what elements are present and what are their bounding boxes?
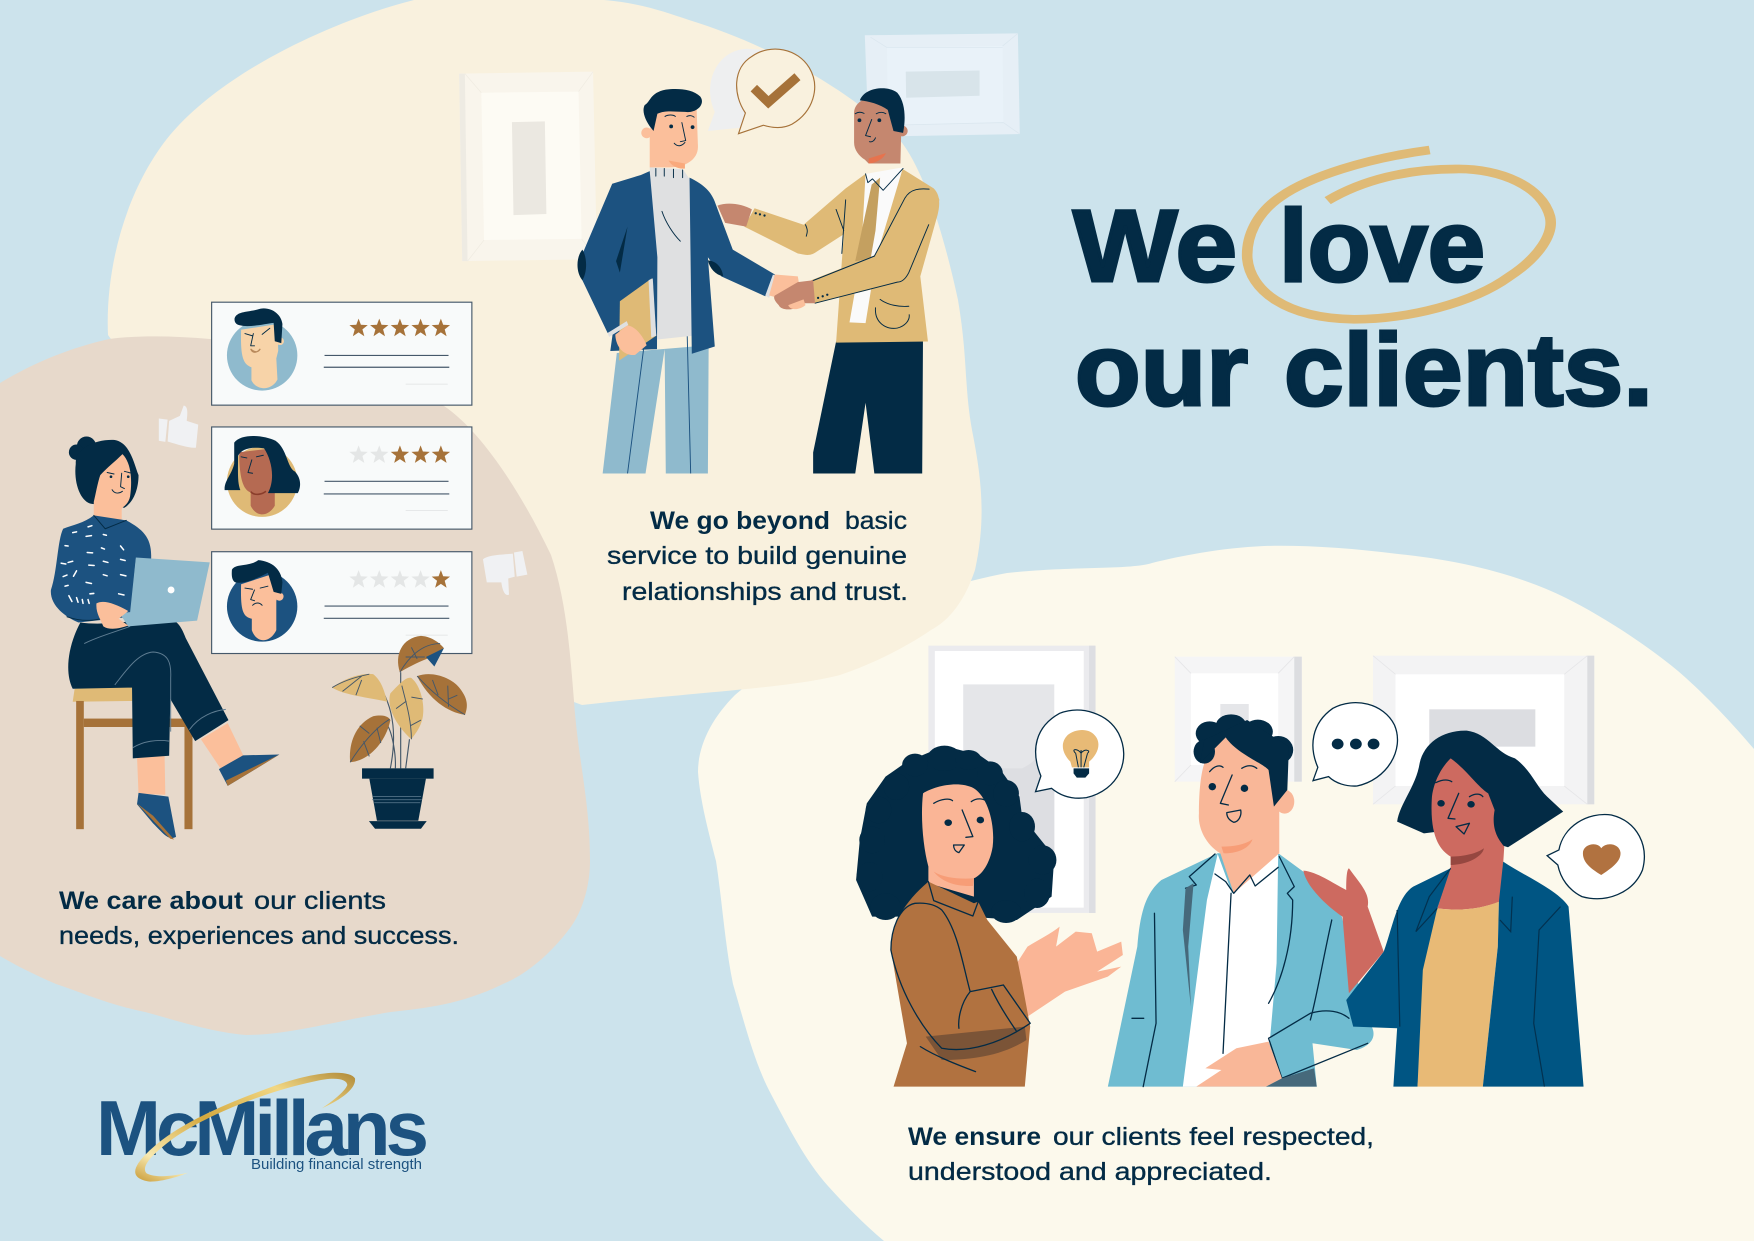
figure: seated woman xyxy=(51,437,279,840)
logo: McMillans: Building financial strength xyxy=(251,1156,422,1173)
man right xyxy=(717,88,939,473)
face and neck xyxy=(94,454,131,525)
curly hair xyxy=(856,746,1056,923)
speech bubble shadow xyxy=(708,49,773,131)
review card 2 xyxy=(212,427,472,529)
text: we go beyond: relationships and trust. xyxy=(622,578,908,606)
text: we care about: needs, experiences and success. xyxy=(59,922,459,950)
plant xyxy=(332,636,467,829)
man center xyxy=(1108,714,1374,1087)
arms and hands xyxy=(1006,927,1123,1017)
logo: McMillans: McMillans xyxy=(96,1084,429,1172)
text: we go beyond: basic xyxy=(845,507,907,535)
heading: we love our clients xyxy=(1073,150,1653,427)
arm raised xyxy=(1303,868,1384,993)
legs xyxy=(137,723,244,795)
shirt xyxy=(51,515,151,623)
icon: thumbs down xyxy=(483,551,527,595)
illustration: reviews and seated woman xyxy=(51,302,527,840)
laptop xyxy=(119,557,210,626)
heading word clients: clients. xyxy=(1284,313,1653,427)
woman right xyxy=(1303,731,1584,1087)
brown shirt xyxy=(891,882,1030,1087)
chair xyxy=(73,686,192,829)
icon: thumbs up xyxy=(159,406,198,448)
curly hair xyxy=(1194,714,1293,807)
panel: tan blob xyxy=(0,336,590,1035)
text: we ensure: our clients feel respected, xyxy=(1053,1123,1374,1151)
stars xyxy=(391,445,450,463)
review card 1 xyxy=(212,302,472,405)
text: we care about xyxy=(59,887,459,950)
wall frame left xyxy=(459,72,597,261)
trousers xyxy=(68,618,228,758)
star xyxy=(432,570,450,588)
review card 3 xyxy=(212,552,472,654)
man left xyxy=(577,89,777,473)
panel: cream blob xyxy=(108,0,982,705)
heading line 1 word: We xyxy=(1073,189,1237,303)
wall frame A xyxy=(928,646,1096,913)
panel: ivory blob xyxy=(698,546,1754,1241)
speech bubble: idea xyxy=(1036,710,1124,798)
woman left xyxy=(856,746,1123,1087)
speech bubble with check xyxy=(737,49,815,134)
text: we ensure: understood and appreciated. xyxy=(908,1158,1272,1186)
wall frame B xyxy=(1175,657,1302,782)
heading word our: our xyxy=(1075,313,1248,427)
text: we go beyond: service to build genuine xyxy=(607,542,907,570)
illustration: handshake xyxy=(459,33,1020,473)
wall frame right xyxy=(865,33,1020,137)
text: we go beyond: We go beyond xyxy=(650,507,830,535)
illustration: three colleagues xyxy=(856,646,1644,1087)
heading word love: love xyxy=(1279,189,1485,303)
speech bubble: heart xyxy=(1547,815,1644,899)
hand xyxy=(96,602,128,629)
hair bun and hair xyxy=(69,437,139,508)
stars xyxy=(349,319,450,336)
text: we ensure: We ensure xyxy=(908,1123,1041,1151)
blue jacket xyxy=(1346,868,1451,1087)
circle scribble around love xyxy=(1247,150,1551,319)
text: we care about: We care about xyxy=(59,887,244,915)
logo swoosh xyxy=(135,1073,355,1182)
wall frame C xyxy=(1373,656,1594,804)
text: we care about: our clients xyxy=(254,887,386,915)
speech bubble: dots xyxy=(1313,703,1397,786)
shoes xyxy=(137,755,279,840)
text: we go beyond xyxy=(607,507,908,606)
text: we ensure xyxy=(908,1123,1374,1186)
